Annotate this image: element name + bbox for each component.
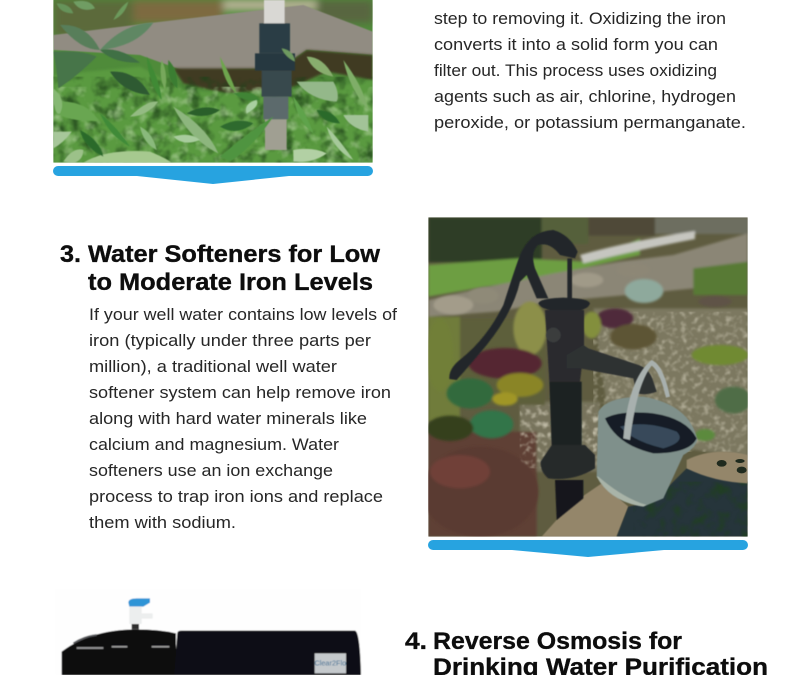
text block: water softeners: softeners use an ion exchange [89, 461, 333, 480]
text block: water softeners: iron (typically under three parts per [89, 331, 372, 350]
bucket [597, 360, 697, 507]
pump [449, 230, 657, 520]
heading: section 4: Reverse Osmosis for [433, 628, 682, 655]
text block: water softeners: calcium and magnesium. Water [89, 435, 339, 454]
text block: oxidizing iron [434, 9, 746, 132]
heading: section 3 [60, 241, 380, 296]
divider bar under pump photo [428, 540, 748, 557]
heading: section 3: 3. [60, 241, 81, 268]
photo: reverse osmosis tank [55, 588, 362, 675]
text block: oxidizing iron: step to removing it. Oxidizing the iron [434, 9, 726, 28]
text block: water softeners: process to trap iron ions and replace [89, 487, 383, 506]
photo: well pipe in green plants [53, 0, 373, 163]
heading: section 3: to Moderate Iron Levels [88, 269, 373, 296]
heading: section 4: 4. [405, 628, 427, 655]
text block: water softeners: along with hard water minerals like [89, 409, 367, 428]
text block: oxidizing iron: filter out. This process uses oxidizing [434, 61, 717, 80]
text block: oxidizing iron: converts it into a solid form you can [434, 35, 718, 54]
text block: oxidizing iron: agents such as air, chlorine, hydrogen [434, 87, 736, 106]
text block: water softeners [89, 305, 397, 532]
text block: water softeners: million), a traditional well water [89, 357, 338, 376]
stone trough and dark water [542, 483, 628, 537]
photo: reverse osmosis tank: Clear2Flo [314, 658, 346, 667]
divider bar under first photo [53, 166, 373, 184]
heading: section 4 [405, 628, 768, 675]
text block: water softeners: them with sodium. [89, 513, 236, 532]
text block: water softeners: softener system can help remove iron [89, 383, 391, 402]
heading: section 3: Water Softeners for Low [88, 241, 380, 268]
photo: hand pump and bucket [422, 217, 752, 537]
text block: oxidizing iron: peroxide, or potassium permanganate. [434, 113, 746, 132]
text block: water softeners: If your well water contains low levels of [89, 305, 397, 324]
